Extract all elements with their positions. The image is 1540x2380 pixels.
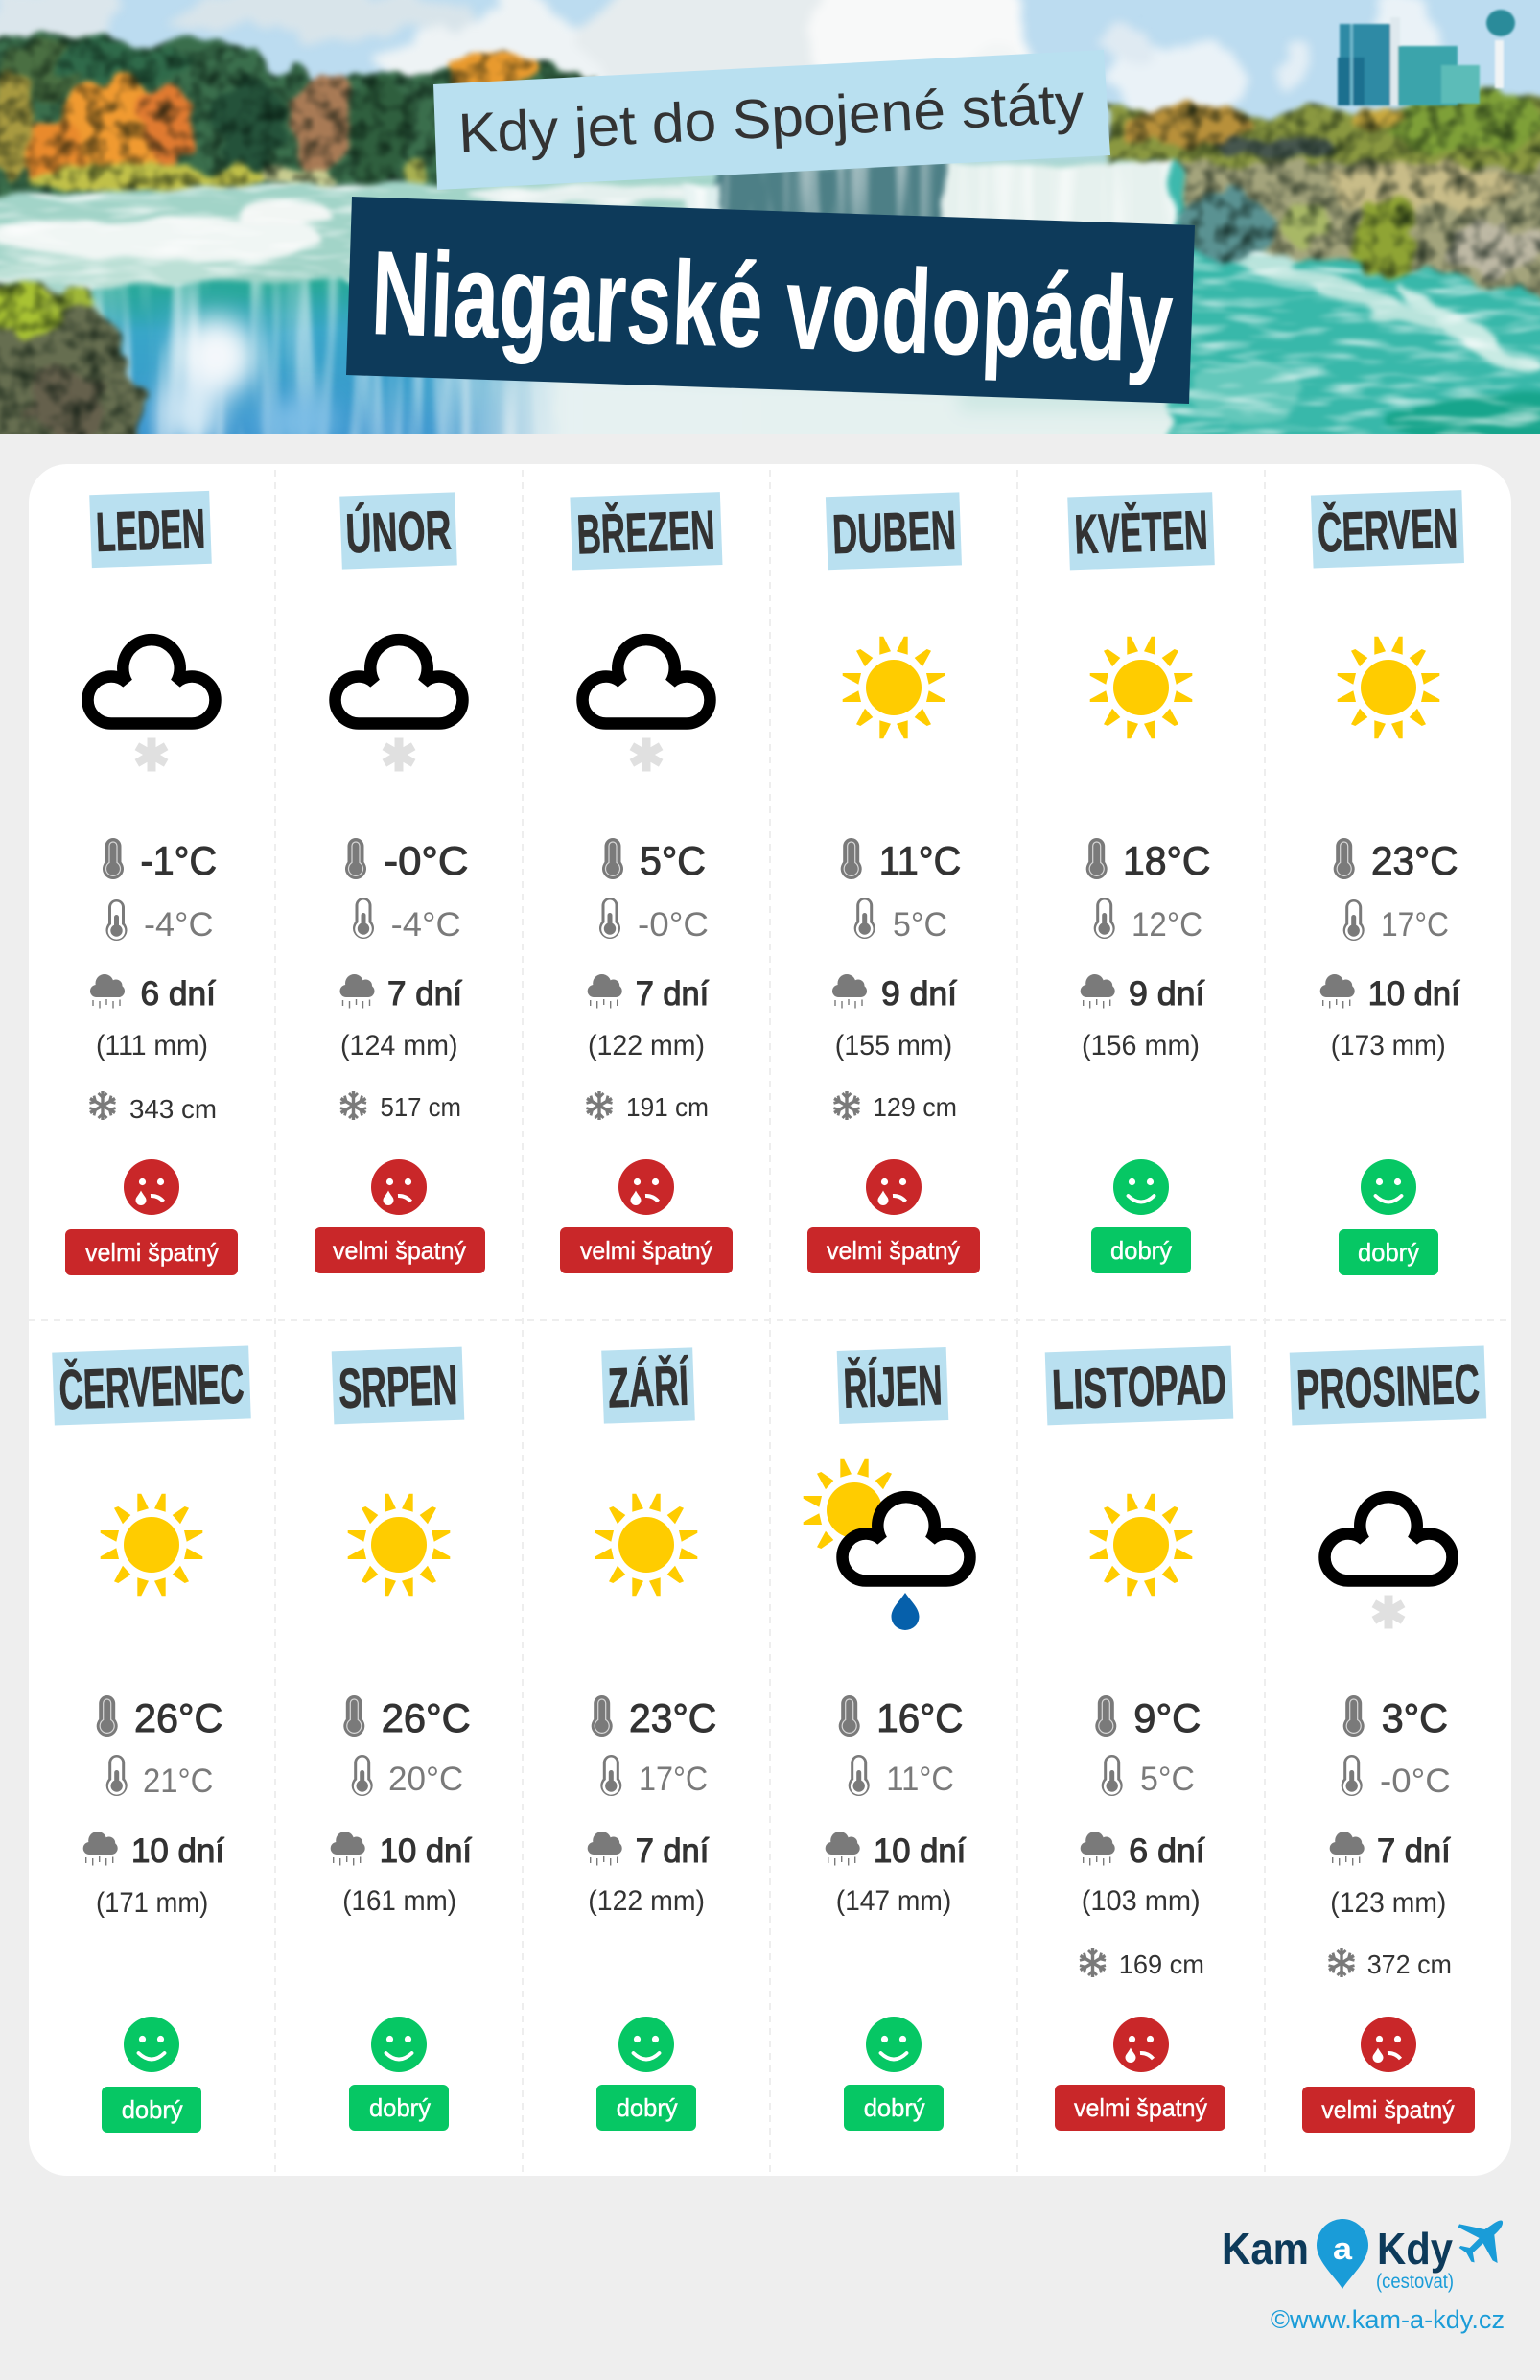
icon: happy face [1113,1159,1169,1215]
low temperature: 17°C [1381,906,1449,944]
icon: sad face [371,1159,427,1215]
icon: rain [1081,974,1115,1009]
rainy days: 7 dní [1377,1832,1451,1870]
icon: sun [1338,637,1439,738]
icon: thermometer high [592,1695,613,1737]
rainfall: (173 mm) [1331,1030,1446,1062]
subtitle banner: Kdy jet do Spojené státy [456,72,1085,165]
icon: rain [1081,1832,1115,1866]
icon: cloud with snow [1325,1497,1452,1628]
rainy days: 10 dní [380,1832,472,1870]
month label [570,492,722,571]
icon: rain [826,1832,860,1866]
low temperature: 21°C [143,1762,213,1800]
rainfall: (122 mm) [588,1885,705,1917]
snowfall: 129 cm [873,1092,957,1122]
panel: rijen [804,1347,969,2131]
month label: LEDEN [95,498,206,564]
rating badge: dobrý [122,2095,183,2124]
month label: DUBEN [831,500,957,566]
low temperature: -0°C [1380,1762,1451,1800]
rating badge: velmi špatný [1321,2095,1455,2124]
icon: rain [588,1832,622,1866]
rainfall: (124 mm) [340,1030,458,1062]
icon: rain [331,1832,365,1866]
high temperature: -0°C [384,838,468,883]
rating badge: dobrý [617,2093,678,2122]
high temperature: 23°C [629,1695,716,1740]
icon: airplane [1458,2220,1503,2263]
icon: sun [101,1494,202,1596]
icon: happy face [866,2017,922,2072]
icon: snowflake [1327,1948,1356,1977]
icon: thermometer high [1334,838,1355,879]
title banner [346,197,1195,404]
rainy days: 10 dní [874,1832,967,1870]
header photo: Niagara Falls landscape [0,0,1540,470]
rainy days: 9 dní [1129,975,1205,1013]
rating badge [560,1227,733,1273]
rainy days: 7 dní [387,975,462,1013]
high temperature: 5°C [640,838,706,883]
rating badge [1339,1229,1438,1275]
icon: snowflake [832,1091,861,1120]
icon: thermometer high [839,1695,860,1737]
icon: cloud with snow [336,640,462,771]
month label: SRPEN [338,1354,458,1420]
low temperature: 20°C [388,1761,463,1798]
rainfall: (147 mm) [836,1885,951,1917]
rating badge: velmi špatný [827,1236,960,1265]
rainy days: 6 dní [140,975,216,1013]
snowfall: 343 cm [129,1094,217,1124]
rainy days: 7 dní [636,1832,710,1870]
month label: ÚNOR [344,500,453,565]
panel: listopad [1045,1346,1233,2131]
rainfall: (103 mm) [1082,1885,1201,1917]
month label: ŘÍJEN [842,1354,944,1420]
month label [89,491,212,568]
icon: map pin [1317,2219,1368,2289]
panel: srpen [331,1347,472,2131]
title banner: Niagarské vodopády [369,226,1175,387]
rainfall: (161 mm) [342,1885,456,1917]
icon: rain [339,974,374,1009]
panel: cerven [1311,490,1464,1275]
icon: sun behind cloud with rain drop [804,1459,969,1630]
rating badge: velmi špatný [85,1238,219,1267]
icon: rain [1320,974,1355,1009]
panel: cervenec [52,1345,251,2133]
icon: sun [595,1494,697,1596]
rating badge [596,2085,696,2131]
icon: snowflake [1078,1948,1108,1977]
rainfall: (156 mm) [1082,1030,1200,1062]
high temperature: -1°C [140,838,217,883]
rating badge [1055,2085,1225,2131]
low temperature: -4°C [391,906,461,944]
month label: ČERVENEC [58,1353,245,1421]
icon: thermometer low [599,898,620,939]
low temperature: 12°C [1132,906,1202,944]
month label: LISTOPAD [1051,1353,1227,1421]
month label [339,492,457,570]
icon: sun [348,1494,450,1596]
rainy days: 7 dní [636,975,709,1013]
rating badge [102,2087,201,2133]
icon: rain [1330,1832,1365,1866]
subtitle banner [433,50,1110,190]
month label: BŘEZEN [575,500,716,567]
rating badge [1091,1227,1191,1273]
rainy days: 6 dní [1129,1832,1205,1870]
icon: thermometer low [1343,899,1365,941]
icon: sad face [1361,2017,1416,2072]
low temperature: 11°C [886,1761,954,1798]
rating badge: dobrý [864,2093,925,2122]
logo: Kam a Kdy: a [1333,2231,1352,2266]
month label [837,1347,948,1424]
icon: sun [843,637,945,738]
icon: snowflake [338,1091,368,1120]
rating badge [349,2085,449,2131]
month label [826,492,962,570]
icon: thermometer low [600,1755,621,1796]
rating badge: dobrý [1110,1236,1172,1265]
icon: thermometer low [849,1755,870,1796]
rating badge [844,2085,944,2131]
icon: sad face [1113,2017,1169,2072]
icon: snowflake [88,1091,117,1120]
icon: rain [83,1832,118,1866]
rating badge [65,1229,238,1275]
rating badge: velmi špatný [580,1236,712,1265]
icon: thermometer high [345,838,366,879]
month label [601,1347,695,1424]
rainfall: (171 mm) [96,1887,208,1919]
month label: KVĚTEN [1073,500,1209,566]
icon: thermometer high [602,838,623,879]
rainfall: (123 mm) [1330,1887,1446,1919]
icon: thermometer low [105,899,127,941]
icon: sad face [866,1159,922,1215]
website credit: ©www.kam-a-kdy.cz [1271,2305,1505,2334]
logo: Kam a Kdy: Kam [1222,2224,1309,2274]
rainfall: (155 mm) [835,1030,952,1062]
month label [332,1347,464,1424]
icon: happy face [618,2017,674,2072]
icon: sun [1090,1494,1192,1596]
low temperature: 5°C [1140,1761,1195,1798]
icon: happy face [124,2017,179,2072]
icon: thermometer low [352,1755,373,1796]
snowfall: 517 cm [380,1092,461,1122]
icon: rain [588,974,622,1009]
icon: thermometer high [1086,838,1108,879]
logo: Kam a Kdy [1222,2219,1503,2293]
month label [1045,1346,1233,1425]
month label [52,1345,251,1426]
low temperature: -4°C [144,906,213,944]
high temperature: 3°C [1382,1695,1448,1740]
panel: leden [65,491,238,1275]
rainfall: (122 mm) [588,1030,705,1062]
rainy days: 10 dní [131,1832,224,1870]
icon: thermometer low [353,898,374,939]
rainfall: (111 mm) [96,1030,208,1062]
panel: month grid [29,464,1511,2176]
icon: happy face [1361,1159,1416,1215]
panel: duben [807,492,980,1273]
icon: thermometer high [343,1695,364,1737]
icon: thermometer high [97,1695,118,1737]
icon: thermometer high [103,838,124,879]
icon: happy face [371,2017,427,2072]
low temperature: -0°C [638,906,709,944]
icon: snowflake [585,1091,614,1120]
rating badge [1302,2087,1475,2133]
high temperature: 18°C [1123,838,1210,883]
rating badge [807,1227,980,1273]
icon: thermometer low [1342,1755,1363,1796]
rating badge: velmi špatný [333,1236,466,1265]
rainy days: 10 dní [1368,975,1460,1013]
panel: prosinec [1290,1345,1486,2133]
logo: Kam a Kdy: (cestovat) [1376,2271,1454,2293]
icon: sad face [618,1159,674,1215]
icon: sun [1090,637,1192,738]
low temperature: 17°C [639,1761,708,1798]
high temperature: 9°C [1133,1695,1201,1740]
icon: rain [832,974,867,1009]
month label [1067,492,1215,570]
snowfall: 191 cm [626,1092,709,1122]
month label [1311,490,1464,569]
icon: thermometer low [106,1755,128,1796]
rating badge [315,1227,485,1273]
icon: thermometer low [1102,1755,1123,1796]
icon: thermometer high [1095,1695,1116,1737]
icon: cloud with snow [88,640,215,771]
rainy days: 9 dní [881,975,957,1013]
icon: rain [90,974,125,1009]
month label: ZÁŘÍ [607,1355,690,1419]
icon: thermometer high [841,838,862,879]
low temperature: 5°C [893,906,947,944]
high temperature: 26°C [134,1695,222,1740]
icon: thermometer low [854,898,875,939]
high temperature: 11°C [879,838,961,883]
panel: brezen [560,492,733,1273]
icon: thermometer low [1094,898,1115,939]
rating badge: dobrý [1358,1238,1419,1267]
panel: kveten [1067,492,1215,1273]
icon: thermometer high [1343,1695,1365,1737]
high temperature: 23°C [1371,838,1458,883]
icon: sad face [124,1159,179,1215]
rating badge: velmi špatný [1074,2093,1207,2122]
snowfall: 372 cm [1367,1949,1452,1979]
panel: zari [588,1347,716,2131]
icon: cloud with snow [583,640,710,771]
panel: unor [315,492,485,1273]
high temperature: 16°C [876,1695,963,1740]
rating badge: dobrý [369,2093,431,2122]
snowfall: 169 cm [1119,1949,1204,1979]
logo: Kam a Kdy: Kdy [1377,2224,1453,2274]
high temperature: 26°C [382,1695,471,1740]
